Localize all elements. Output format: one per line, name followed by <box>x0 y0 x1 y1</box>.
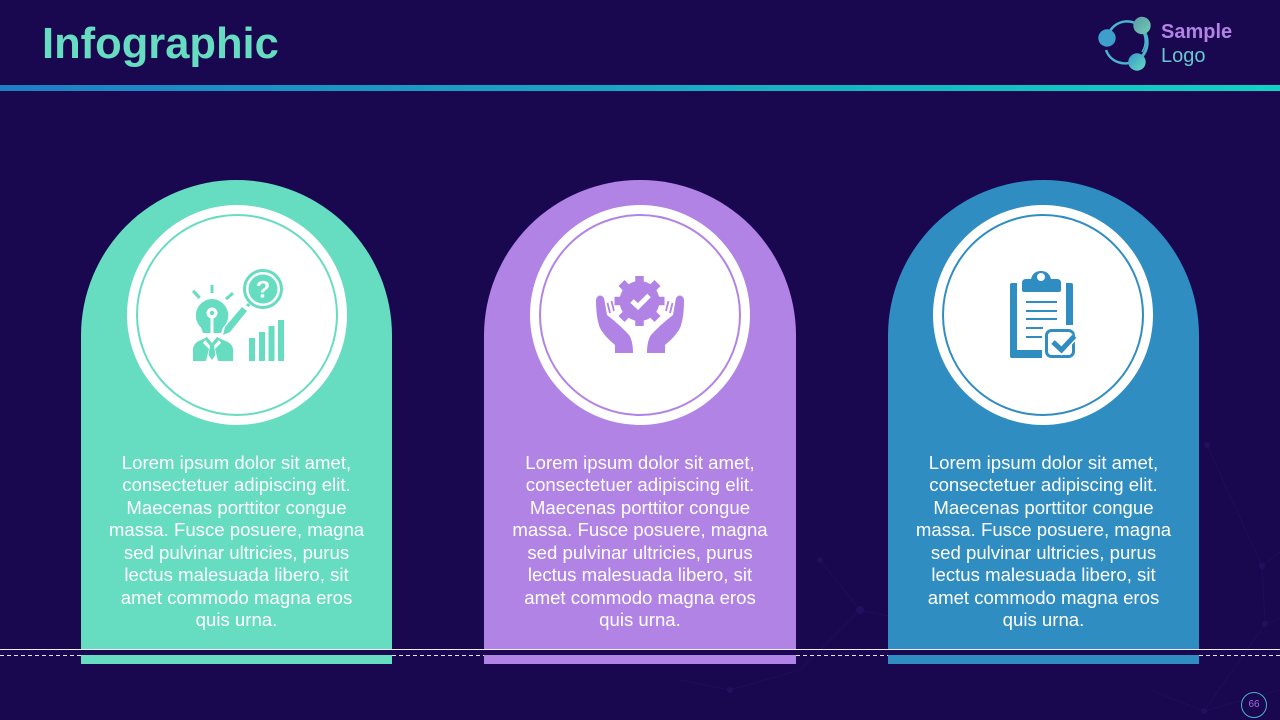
text block: Lorem ipsum dolor sit amet, <box>929 452 1158 473</box>
text block: lectus malesuada libero, sit <box>528 564 752 585</box>
logo text <box>1161 21 1232 67</box>
page number <box>1241 692 1267 718</box>
text block <box>916 452 1172 630</box>
text block: Lorem ipsum dolor sit amet, <box>122 452 351 473</box>
panel: card 3 <box>888 180 1199 664</box>
page number: 66 <box>1248 699 1260 710</box>
text block: Maecenas porttitor congue <box>530 497 750 518</box>
icon: idea person with chart: ? <box>256 276 270 304</box>
logo text: Sample <box>1161 21 1232 43</box>
footer rules <box>0 649 1280 656</box>
text block: amet commodo magna eros <box>121 587 352 608</box>
panel: card 1 <box>81 180 392 664</box>
text block: lectus malesuada libero, sit <box>931 564 1156 585</box>
icon: idea person with chart <box>192 269 284 361</box>
text block: consectetuer adipiscing elit. <box>929 474 1158 495</box>
text block: amet commodo magna eros <box>928 587 1159 608</box>
text block: consectetuer adipiscing elit. <box>122 474 351 495</box>
text block: Lorem ipsum dolor sit amet, <box>525 452 755 473</box>
text block: massa. Fusce posuere, magna <box>916 519 1171 540</box>
text block: consectetuer adipiscing elit. <box>526 474 754 495</box>
text block: sed pulvinar ultricies, purus <box>527 542 753 563</box>
panel: card 2 <box>484 180 796 664</box>
text block: quis urna. <box>1003 609 1084 630</box>
text block: lectus malesuada libero, sit <box>124 564 349 585</box>
text block: massa. Fusce posuere, magna <box>512 519 768 540</box>
icon: hands holding gear <box>596 276 684 353</box>
text block: sed pulvinar ultricies, purus <box>931 542 1156 563</box>
text block <box>512 452 768 630</box>
text block <box>109 452 364 630</box>
logo <box>1098 16 1232 71</box>
text block: sed pulvinar ultricies, purus <box>124 542 349 563</box>
logo mark <box>1098 16 1151 71</box>
text block: massa. Fusce posuere, magna <box>109 519 364 540</box>
header rule <box>0 85 1280 91</box>
text block: Maecenas porttitor congue <box>126 497 347 518</box>
icon: clipboard with check <box>1010 271 1076 358</box>
text block: Maecenas porttitor congue <box>933 497 1154 518</box>
text block: quis urna. <box>599 609 681 630</box>
text block: amet commodo magna eros <box>524 587 756 608</box>
title: Infographic <box>42 20 279 68</box>
logo text: Logo <box>1161 45 1206 67</box>
text block: quis urna. <box>196 609 277 630</box>
